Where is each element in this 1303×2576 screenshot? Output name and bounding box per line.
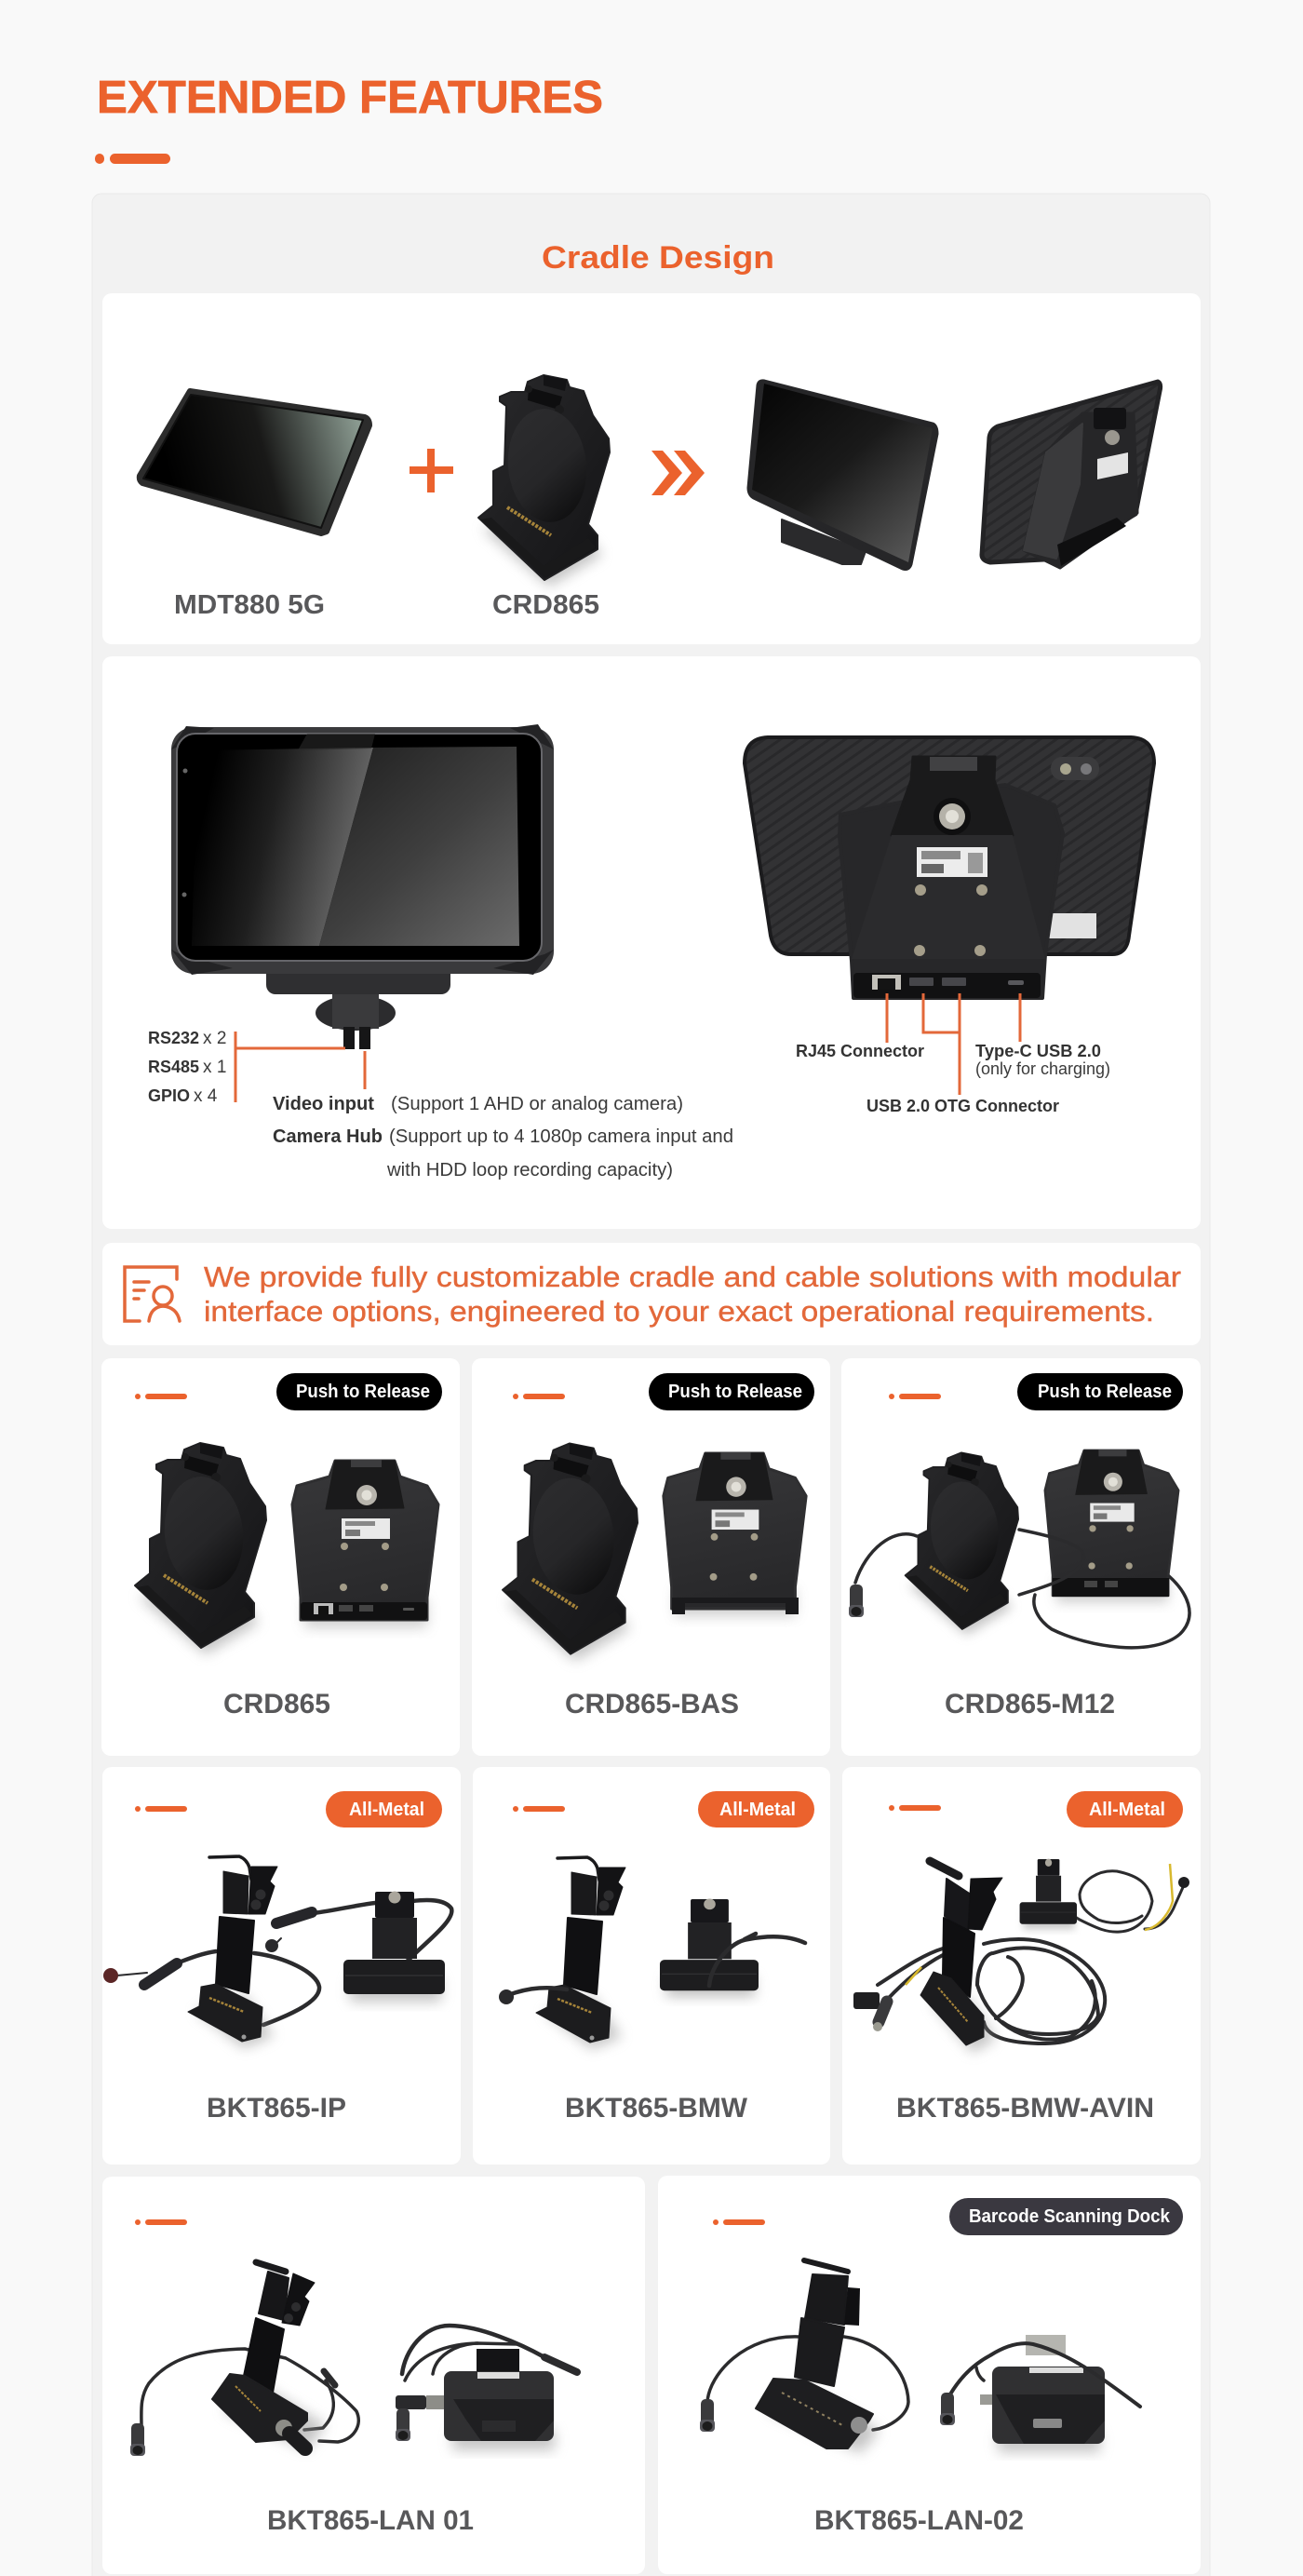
card: CRD865-BAS [472, 1358, 830, 1756]
card accent [135, 2219, 187, 2225]
double chevron arrow [652, 451, 705, 495]
connectors [103, 1912, 312, 1985]
callout lines left [235, 1032, 365, 1102]
card: BKT865-LAN-02 [658, 2176, 1201, 2574]
cradle back [664, 1452, 806, 1616]
label: BKT865-IP [207, 2093, 346, 2124]
M12 connector left [130, 2423, 145, 2456]
card: CRD865-M12 [841, 1358, 1201, 1756]
callout lines right [887, 993, 1020, 1095]
label: CRD865-BAS [565, 1689, 739, 1720]
small coil cable [1045, 1871, 1184, 1932]
bracket [536, 1857, 625, 2049]
cradle back [292, 1460, 438, 1627]
text: RJ45: RJ45 Connector [796, 1042, 924, 1060]
badge: push to release: Push to Release [296, 1382, 430, 1402]
scanner dock [980, 2335, 1105, 2452]
card accent [713, 2219, 765, 2225]
icon: document with person [125, 1267, 180, 1321]
text: camera hub detail line 2: with HDD loop recording capacity) [386, 1160, 673, 1180]
text: Type-C: Type-C USB 2.0 [975, 1042, 1101, 1060]
label: BKT865-LAN-02 [814, 2505, 1024, 2536]
card: BKT865-LAN 01 [102, 2177, 645, 2574]
M12 connector left [700, 2399, 715, 2432]
badge: push to release [649, 1373, 814, 1410]
label: BKT865-BMW [565, 2093, 748, 2124]
text: camera hub: Camera Hub [273, 1126, 383, 1147]
section heading: Cradle Design [542, 240, 774, 276]
bracket [920, 1861, 1002, 2053]
badge: barcode scanning dock [949, 2198, 1183, 2235]
card accent [889, 1394, 941, 1399]
bracket [756, 2260, 880, 2453]
bracket [212, 2262, 326, 2450]
cradle front [503, 1443, 638, 1661]
title accent [95, 154, 170, 164]
text: video input: Video input [273, 1094, 374, 1114]
cables [855, 1530, 1189, 1648]
card: BKT865-BMW-AVIN [842, 1767, 1201, 2165]
card accent [513, 1806, 565, 1812]
card accent [513, 1394, 565, 1399]
badge: all-metal [326, 1791, 442, 1827]
M12 connector right [396, 2408, 410, 2441]
tablet MDT880 angled [140, 391, 369, 533]
panel: product combination [102, 293, 1201, 644]
cradle front [906, 1452, 1018, 1635]
cables [707, 2337, 984, 2430]
text: RS232: RS232x 2 [148, 1029, 226, 1048]
M12 connector right [940, 2393, 955, 2425]
badge: push to release: Push to Release [1038, 1382, 1172, 1402]
panel: connectors [102, 656, 1201, 1229]
badge: all-metal [698, 1791, 814, 1827]
tablet on cradle front [749, 382, 936, 568]
connector knob [499, 1989, 514, 2004]
text: video input detail: (Support 1 AHD or analog camera) [391, 1094, 683, 1114]
badge: barcode scanning dock: Barcode Scanning Dock [969, 2206, 1171, 2227]
label: BKT865-BMW-AVIN [896, 2093, 1154, 2124]
badge: all-metal: All-Metal [1089, 1800, 1165, 1820]
label: CRD865: CRD865 [492, 590, 599, 620]
main panel background [92, 194, 1210, 2576]
scanner dock [396, 2349, 555, 2450]
card: BKT865-IP [102, 1767, 461, 2165]
cradle CRD865 [478, 375, 610, 587]
cradle back [1045, 1450, 1178, 1602]
front cable over dock [947, 2343, 1140, 2407]
small bracket [1020, 1859, 1077, 1929]
yellow wires [906, 1864, 1173, 1985]
text: RS485: RS485x 1 [148, 1058, 226, 1077]
text: USB OTG: USB 2.0 OTG Connector [866, 1097, 1059, 1115]
card: BKT865-BMW [473, 1767, 830, 2165]
text: camera hub detail: (Support up to 4 1080p camera input and [389, 1126, 733, 1147]
badge: all-metal [1067, 1791, 1183, 1827]
connectors [853, 1877, 1189, 2031]
badge: push to release: Push to Release [668, 1382, 802, 1402]
plus sign [410, 449, 453, 492]
card accent [889, 1805, 941, 1811]
tablet front with dock [171, 724, 554, 1049]
coiled cables [878, 1939, 1105, 2043]
mount [343, 1892, 445, 2002]
callout text line 2: interface options, engineered to your exact operational requirements. [204, 1295, 1154, 1328]
mount [660, 1899, 759, 1997]
label: CRD865-M12 [945, 1689, 1115, 1720]
title: EXTENDED FEATURES [97, 73, 603, 123]
text: only for charging: (only for charging) [975, 1059, 1110, 1078]
badge: push to release [1017, 1373, 1183, 1410]
badge: push to release [276, 1373, 442, 1410]
label: CRD865 [223, 1689, 330, 1720]
cables [508, 1934, 805, 1995]
text: GPIO: GPIOx 4 [148, 1086, 218, 1106]
label: BKT865-LAN 01 [267, 2505, 474, 2536]
card accent [135, 1394, 187, 1399]
badge: all-metal: All-Metal [349, 1800, 424, 1820]
badge: all-metal: All-Metal [719, 1800, 796, 1820]
M12 connector [849, 1585, 864, 1617]
label: MDT880 5G: MDT880 5G [174, 590, 325, 620]
card accent [135, 1806, 187, 1812]
tablet with cradle rear [982, 382, 1161, 568]
callout text line 1: We provide fully customizable cradle and cable solutions with modular [204, 1261, 1181, 1293]
cables [141, 2326, 577, 2442]
cables [116, 1900, 451, 2025]
tablet rear with cradle [745, 737, 1154, 998]
panel: customization callout [102, 1243, 1201, 1345]
card: CRD865 [101, 1358, 460, 1756]
bracket [188, 1856, 277, 2048]
cradle front [135, 1443, 266, 1654]
